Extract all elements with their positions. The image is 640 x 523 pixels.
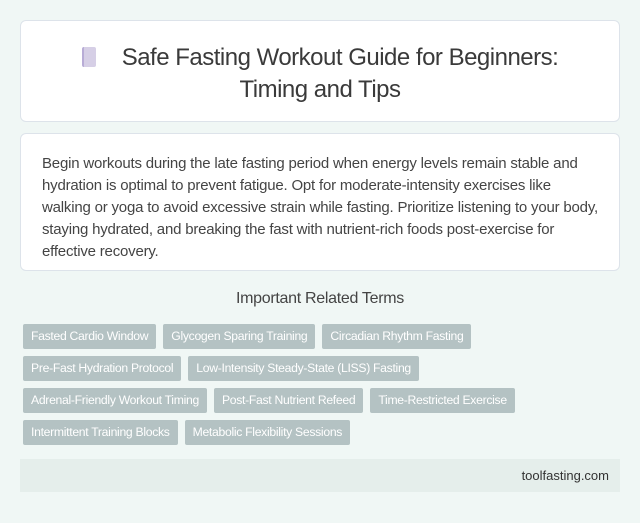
tags: Metabolic Flexibility Sessions xyxy=(193,425,342,439)
title card: Safe Fasting Workout Guide for Beginners: xyxy=(122,44,558,71)
title card xyxy=(20,20,620,122)
description text block: Begin workouts during the late fasting period when energy levels remain stable and xyxy=(42,155,578,172)
tags: Fasted Cardio Window xyxy=(31,329,148,343)
footer xyxy=(20,459,620,492)
description text block: staying hydrated, and breaking the fast with nutrient-rich foods post-exercise for xyxy=(42,221,554,238)
tags: Pre-Fast Hydration Protocol xyxy=(31,361,173,375)
tags: Low-Intensity Steady-State (LISS) Fasting xyxy=(196,361,411,375)
icon: document xyxy=(82,47,96,67)
description text block: walking or yoga to avoid excessive strain while fasting. Prioritize listening to your body, xyxy=(42,199,598,216)
description text block xyxy=(20,133,620,271)
tags: Time-Restricted Exercise xyxy=(378,393,507,407)
tags: Glycogen Sparing Training xyxy=(171,329,307,343)
tags: Circadian Rhythm Fasting xyxy=(330,329,463,343)
tags: Adrenal-Friendly Workout Timing xyxy=(31,393,199,407)
description text block: hydration is optimal to prevent fatigue. Opt for moderate-intensity exercises like xyxy=(42,177,551,194)
footer: toolfasting.com xyxy=(522,468,609,483)
title card: Timing and Tips xyxy=(239,76,400,103)
heading: related terms: Important Related Terms xyxy=(236,290,404,307)
description text block: effective recovery. xyxy=(42,243,159,260)
tags: Post-Fast Nutrient Refeed xyxy=(222,393,355,407)
tags xyxy=(23,324,515,445)
tags: Intermittent Training Blocks xyxy=(31,425,170,439)
